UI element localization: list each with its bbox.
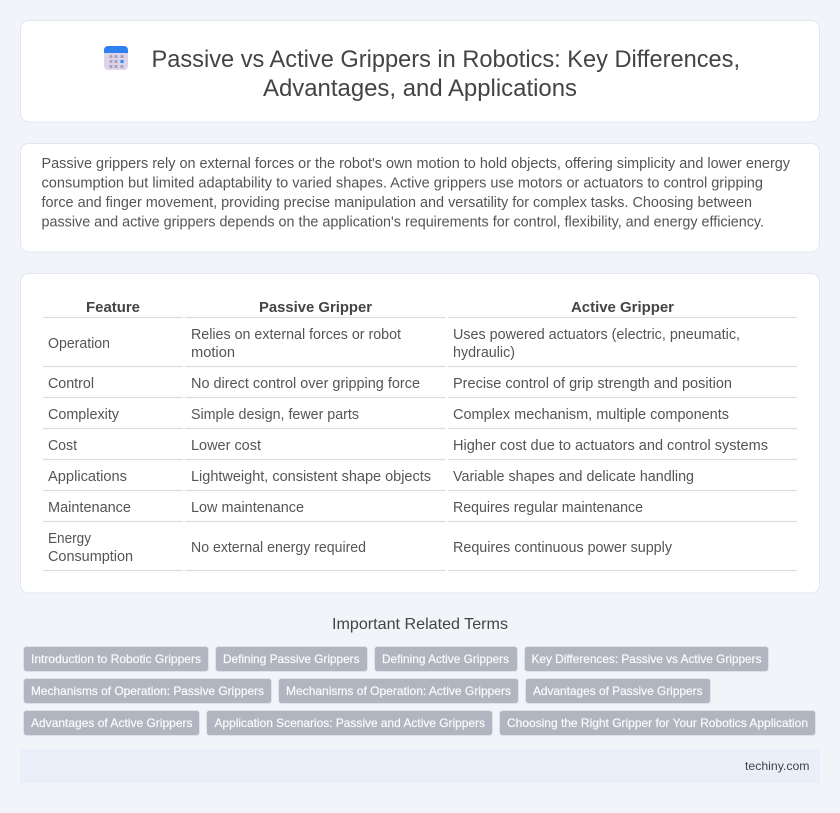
tag: Key Differences: Passive vs Active Grippers bbox=[532, 652, 762, 666]
table row: cost: Cost bbox=[48, 438, 77, 454]
table row: energy consumption: Consumption bbox=[48, 549, 133, 565]
icon: calendar bbox=[104, 46, 128, 70]
table header row: Feature bbox=[86, 300, 140, 316]
text block: introduction: Passive grippers rely on external forces or the robot's own motion to hold objects, offering simplicity and lower energy bbox=[42, 156, 791, 172]
table row: operation: motion bbox=[191, 345, 235, 361]
table row: maintenance: Requires regular maintenance bbox=[453, 500, 643, 516]
table row: cost: Lower cost bbox=[191, 438, 261, 454]
text block: introduction: consumption but limited adaptability to varied shapes. Active grippers use motors or actuators to control gripping bbox=[42, 176, 763, 192]
tag bbox=[524, 646, 768, 672]
text block: introduction bbox=[42, 156, 791, 230]
tag bbox=[500, 710, 816, 736]
footer source: techiny.com bbox=[745, 759, 810, 773]
table header row bbox=[86, 300, 674, 316]
tag: Advantages of Passive Grippers bbox=[533, 684, 702, 698]
tag: Defining Active Grippers bbox=[382, 652, 509, 666]
tag bbox=[206, 710, 492, 736]
table row: control bbox=[48, 376, 732, 392]
footer bar bbox=[20, 749, 820, 783]
table row: cost bbox=[48, 438, 768, 454]
table row: applications: Lightweight, consistent shape objects bbox=[191, 469, 431, 485]
table row: cost: Higher cost due to actuators and control systems bbox=[453, 438, 768, 454]
tag list: related terms bbox=[24, 646, 816, 736]
table row: operation bbox=[48, 327, 740, 361]
table row: operation: Operation bbox=[48, 336, 110, 352]
tag: Application Scenarios: Passive and Active Grippers bbox=[214, 716, 485, 730]
table row: energy consumption: Requires continuous power supply bbox=[453, 540, 673, 556]
table row: maintenance: Maintenance bbox=[48, 500, 131, 516]
table row: energy consumption: No external energy required bbox=[191, 540, 366, 556]
table row: operation: Relies on external forces or robot bbox=[191, 327, 401, 343]
table row: applications: Variable shapes and delicate handling bbox=[453, 469, 694, 485]
table row: complexity: Simple design, fewer parts bbox=[191, 407, 359, 423]
tag bbox=[24, 710, 200, 736]
tag: Introduction to Robotic Grippers bbox=[31, 652, 201, 666]
title: Advantages, and Applications bbox=[263, 75, 577, 102]
table row: maintenance bbox=[48, 500, 643, 516]
table header row: Active Gripper bbox=[571, 300, 674, 316]
tag bbox=[374, 646, 518, 672]
table row: complexity: Complex mechanism, multiple components bbox=[453, 407, 729, 423]
table row: complexity bbox=[48, 407, 729, 423]
table row: complexity: Complexity bbox=[48, 407, 120, 423]
text block: introduction: passive and active grippers depends on the application's requirements for control, flexibility, and energy efficiency. bbox=[42, 214, 764, 230]
table row: control: No direct control over gripping force bbox=[191, 376, 420, 392]
tag bbox=[278, 678, 518, 704]
text block: introduction: force and finger movement, providing precise manipulation and versatility for complex tasks. Choosing between bbox=[42, 195, 752, 211]
table row: energy consumption: Energy bbox=[48, 531, 92, 547]
table header row: Passive Gripper bbox=[259, 300, 372, 316]
heading: important related terms: Important Related Terms bbox=[332, 616, 508, 633]
table row: operation: hydraulic) bbox=[453, 345, 515, 361]
title bbox=[152, 46, 740, 102]
tag: Defining Passive Grippers bbox=[223, 652, 360, 666]
table row: applications bbox=[48, 469, 694, 485]
tag bbox=[216, 646, 368, 672]
panel: title header bbox=[20, 20, 820, 122]
tag bbox=[24, 678, 272, 704]
tag bbox=[526, 678, 710, 704]
panel: comparison table bbox=[20, 274, 820, 593]
table row: control: Precise control of grip strength and position bbox=[453, 376, 732, 392]
title: Passive vs Active Grippers in Robotics: Key Differences, bbox=[152, 46, 740, 73]
table row: energy consumption bbox=[48, 531, 673, 565]
table row: control: Control bbox=[48, 376, 94, 392]
tag: Mechanisms of Operation: Passive Grippers bbox=[31, 684, 264, 698]
tag: Mechanisms of Operation: Active Grippers bbox=[286, 684, 511, 698]
tag: Advantages of Active Grippers bbox=[31, 716, 192, 730]
tag bbox=[24, 646, 208, 672]
tag: Choosing the Right Gripper for Your Robotics Application bbox=[507, 716, 808, 730]
panel: introduction text bbox=[20, 144, 820, 252]
table row: applications: Applications bbox=[48, 469, 127, 485]
table row: operation: Uses powered actuators (electric, pneumatic, bbox=[453, 327, 740, 343]
table row: maintenance: Low maintenance bbox=[191, 500, 304, 516]
